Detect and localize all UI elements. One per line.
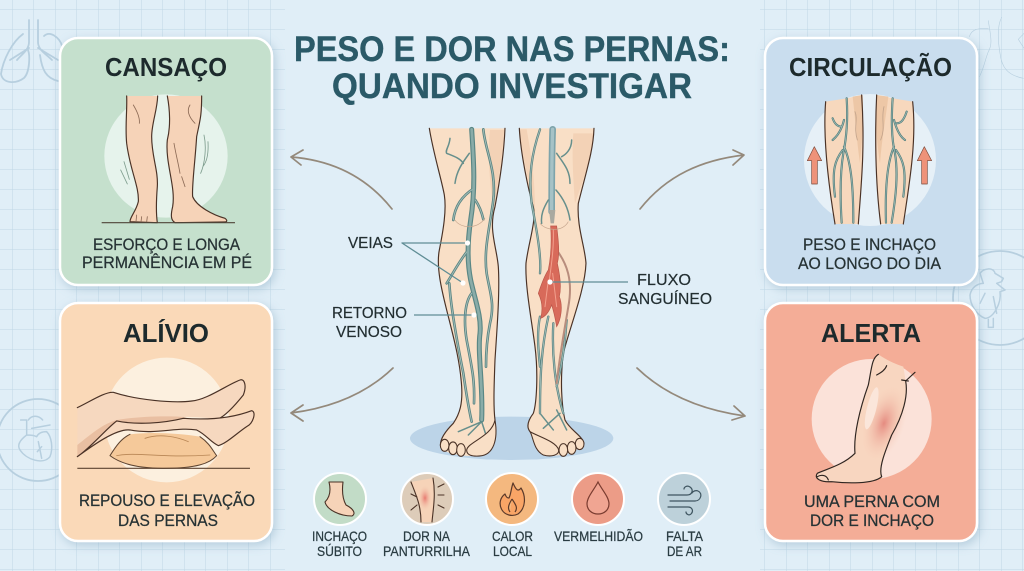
symptom: calor local: LOCAL bbox=[493, 543, 532, 559]
symptom: dor na panturrilha: DOR NA bbox=[403, 528, 451, 544]
symptom: falta de ar: DE AR bbox=[667, 543, 702, 559]
right leg bbox=[519, 128, 594, 456]
heading: circulação: CIRCULAÇÃO bbox=[789, 52, 952, 82]
symptom: calor local bbox=[486, 473, 538, 559]
title: QUANDO INVESTIGAR bbox=[332, 67, 692, 106]
panel: alívio bbox=[60, 303, 272, 541]
heading: alívio: ALÍVIO bbox=[123, 318, 209, 348]
callout: fluxo sanguíneo bbox=[547, 272, 712, 308]
symptom: inchaço súbito: INCHAÇO bbox=[312, 528, 367, 544]
arrow: to alívio bbox=[291, 368, 393, 421]
icon: elevated legs on pillow bbox=[77, 358, 254, 482]
text: cansaço caption bbox=[82, 236, 252, 272]
icon: tired legs bbox=[102, 94, 235, 223]
icon: heart background left bbox=[0, 399, 79, 481]
icon: lungs background left bbox=[1, 20, 62, 82]
text: alívio caption bbox=[79, 490, 255, 530]
symptom: dor na panturrilha bbox=[383, 473, 471, 559]
icon: legs with veins and arrows bbox=[804, 94, 936, 226]
icon: flame bbox=[500, 483, 524, 515]
callout: fluxo sanguíneo: SANGUÍNEO bbox=[618, 289, 712, 308]
arrow: to alerta bbox=[637, 368, 745, 420]
toes: right foot bbox=[530, 432, 584, 456]
title bbox=[294, 30, 730, 106]
text: circulação caption: PESO E INCHAÇO bbox=[803, 236, 936, 254]
text: cansaço caption: PERMANÊNCIA EM PÉ bbox=[82, 253, 252, 272]
symptom: vermelhidão bbox=[554, 473, 643, 544]
left leg bbox=[429, 128, 505, 456]
text: alerta caption: UMA PERNA COM bbox=[804, 493, 940, 511]
title: PESO E DOR NAS PERNAS: bbox=[294, 30, 730, 69]
callout: veias: VEIAS bbox=[348, 235, 393, 252]
symptom: falta de ar: FALTA bbox=[666, 528, 704, 544]
icon: wind bbox=[668, 486, 701, 515]
text: circulação caption bbox=[798, 236, 941, 273]
icon: calf with pain bbox=[411, 478, 444, 522]
text: circulação caption: AO LONGO DO DIA bbox=[798, 255, 941, 273]
icon: lungs background right bbox=[969, 17, 1024, 78]
central legs illustration bbox=[410, 128, 613, 460]
callout: fluxo sanguíneo: FLUXO bbox=[637, 272, 691, 289]
icon: drop bbox=[587, 482, 609, 514]
panel: cansaço bbox=[60, 38, 272, 285]
heading: alerta: ALERTA bbox=[821, 318, 921, 348]
text: alerta caption: DOR E INCHAÇO bbox=[810, 512, 934, 530]
symptom: calor local: CALOR bbox=[492, 528, 533, 544]
callout: retorno venoso: VENOSO bbox=[336, 324, 402, 341]
text: cansaço caption: ESFORÇO E LONGA bbox=[93, 236, 240, 254]
symptom: inchaço súbito: SÚBITO bbox=[317, 543, 362, 559]
symptom: falta de ar bbox=[658, 473, 710, 559]
text: alerta caption bbox=[804, 493, 940, 530]
text: alívio caption: REPOUSO E ELEVAÇÃO bbox=[79, 490, 255, 510]
callout: veias bbox=[348, 235, 470, 286]
arrow: to circulação bbox=[640, 150, 744, 209]
floor shadow bbox=[410, 417, 613, 460]
text: alívio caption: DAS PERNAS bbox=[118, 512, 218, 530]
panel: circulação bbox=[765, 38, 977, 285]
symptom: inchaço súbito bbox=[312, 473, 367, 559]
heading: cansaço: CANSAÇO bbox=[105, 52, 227, 82]
symptom: dor na panturrilha: PANTURRILHA bbox=[383, 543, 471, 559]
arrow: to cansaço bbox=[291, 150, 392, 209]
toes: left foot bbox=[440, 420, 496, 456]
panel: alerta bbox=[765, 303, 977, 541]
icon: swollen foot bbox=[325, 482, 354, 516]
icon: swollen leg bbox=[812, 354, 932, 483]
symptom: vermelhidão: VERMELHIDÃO bbox=[554, 528, 643, 544]
callout: retorno venoso: RETORNO bbox=[332, 305, 407, 322]
callout: retorno venoso bbox=[332, 305, 477, 341]
icon: heart background right bbox=[953, 251, 1024, 345]
